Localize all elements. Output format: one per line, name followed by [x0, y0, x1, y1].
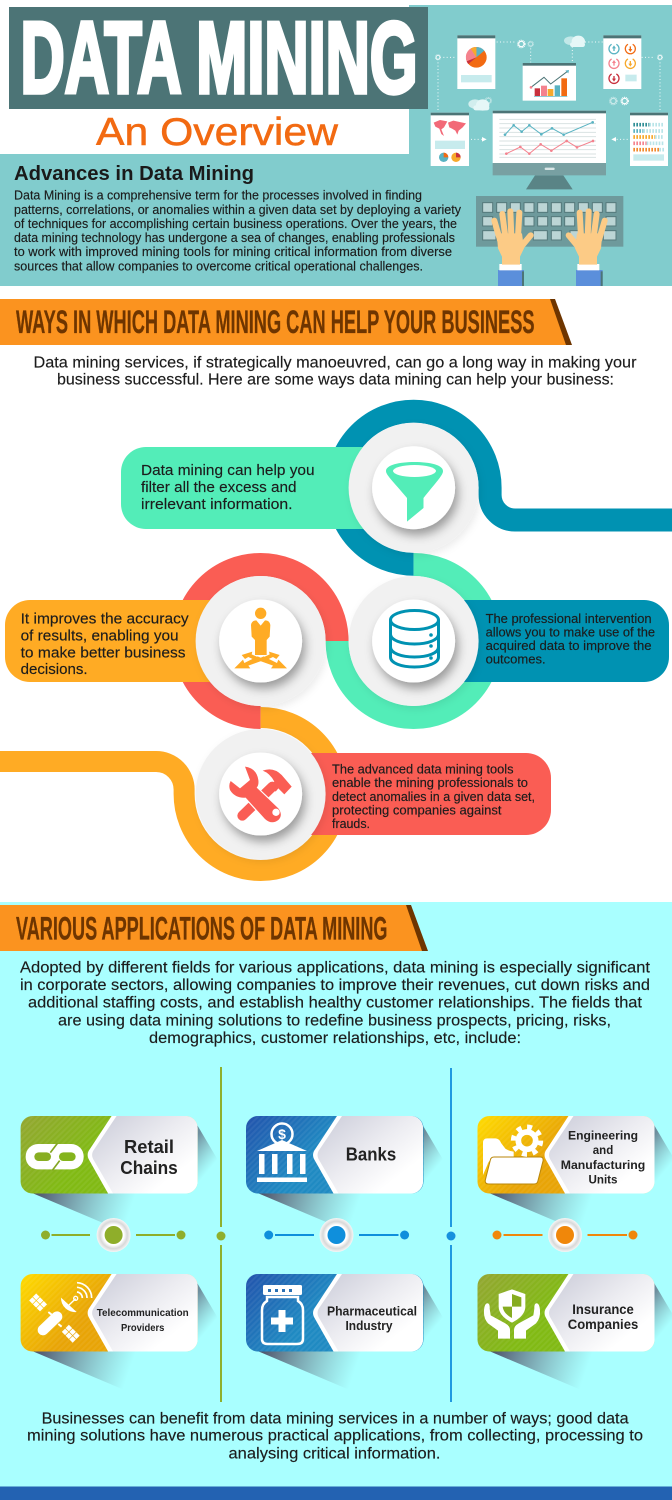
connector: orange node row — [492, 1218, 638, 1252]
text block: section one intro: Data mining services, if strategically manoeuvred, can go a long way in making your — [34, 354, 637, 372]
icon: wrench and hammer — [196, 729, 326, 859]
panel: accuracy benefit — [5, 600, 260, 682]
card: banks — [246, 1116, 448, 1241]
panel: accuracy benefit: decisions. — [21, 661, 88, 678]
text block: closing paragraph — [27, 1410, 643, 1462]
text block: applications intro: demographics, customer relationships, etc, include: — [149, 1030, 521, 1047]
text block: advances paragraph: patterns, correlations, or anomalies within a given data set by deploying a variety — [14, 202, 461, 217]
column divider: green — [216, 1067, 226, 1402]
card: insurance companies — [478, 1274, 672, 1399]
subtitle: An Overview: An Overview — [96, 111, 339, 154]
panel: anomalies benefit: The advanced data mining tools — [332, 762, 514, 776]
panel: outcomes benefit: acquired data to improve the — [486, 639, 652, 653]
panel: anomalies benefit: protecting companies against — [332, 804, 502, 818]
card: engineering and manufacturing: Manufacturing — [561, 1158, 645, 1172]
illustration: data dashboards and monitor — [431, 35, 668, 189]
icon: hands and shield — [484, 1289, 540, 1339]
text block: section one intro: business successful. Here are some ways data mining can help your business: — [57, 372, 614, 388]
panel: anomalies benefit: enable the mining professionals to — [332, 776, 528, 790]
panel: accuracy benefit: of results, enabling you — [21, 628, 179, 644]
panel: accuracy benefit: It improves the accuracy — [21, 610, 189, 628]
text block: advances paragraph: Data Mining is a comprehensive term for the processes involved in finding — [14, 188, 422, 202]
card: engineering and manufacturing: and — [593, 1143, 613, 1157]
text block: applications intro: additional staffing costs, and establish healthy customer relationships. The fields that — [28, 994, 643, 1012]
title: Data Mining — [9, 2, 428, 114]
card: telecommunication providers: Telecommunication — [97, 1307, 189, 1319]
text block: advances paragraph: data mining technology has undergone a sea of changes, enabling professionals — [14, 230, 455, 245]
footer bar — [0, 1486, 672, 1500]
icon: bank building: $ — [278, 1126, 286, 1142]
section banner: various applications — [0, 905, 428, 951]
text block: closing paragraph: Businesses can benefit from data mining services in a number of ways; good data — [42, 1410, 629, 1427]
panel: anomalies benefit — [265, 753, 551, 835]
icon: person at crossroads — [196, 576, 326, 706]
document: pie chart — [457, 35, 495, 89]
connector: red ribbon — [184, 565, 337, 718]
document: world map — [431, 113, 469, 166]
card: retail chains — [21, 1116, 223, 1241]
section banner: various applications: VARIOUS APPLICATIONS OF DATA MINING — [16, 910, 388, 946]
document: circular arrows — [603, 35, 641, 89]
text block: advances paragraph: to work with improved mining tools for mining critical information from diverse — [14, 244, 452, 259]
panel: header background — [0, 5, 672, 286]
heading: Advances in Data Mining: Advances in Data Mining — [14, 163, 254, 185]
text block: applications intro: are using data mining solutions to redefine business prospects, pricing, risks, — [58, 1012, 611, 1030]
card: banks: Banks — [346, 1144, 396, 1164]
text block: closing paragraph: analysing critical information. — [228, 1445, 440, 1462]
icon: folder and gear — [483, 1127, 543, 1184]
monitor with line charts — [493, 111, 606, 189]
card: retail chains: Chains — [120, 1158, 178, 1178]
connector: green node row — [41, 1218, 186, 1252]
connector: green ribbon — [337, 564, 490, 718]
document: bar chart — [523, 63, 576, 101]
card: engineering and manufacturing: Units — [588, 1172, 618, 1186]
card: engineering and manufacturing — [478, 1116, 672, 1241]
column divider: blue — [446, 1068, 456, 1402]
card: telecommunication providers: Providers — [121, 1322, 165, 1334]
panel: filter benefit: irrelevant information. — [141, 496, 292, 513]
text block: advances paragraph: of techniques for accomplishing certain business operations. Over the years, the — [14, 216, 457, 231]
card: insurance companies: Insurance — [572, 1302, 634, 1317]
panel: outcomes benefit — [420, 600, 669, 682]
connector: orange ribbon — [0, 718, 337, 871]
text block: applications intro: in corporate sectors, allowing companies to improve their revenues, cut down risks and — [20, 977, 650, 994]
icon: chain links — [26, 1143, 84, 1170]
panel: outcomes benefit: The professional intervention — [486, 612, 652, 626]
connector: blue node row — [264, 1218, 409, 1252]
panel: anomalies benefit: detect anomalies in a given data set, — [332, 790, 535, 804]
panel: accuracy benefit: to make better business — [21, 644, 186, 662]
panel: filter benefit: filter all the excess and — [141, 479, 296, 496]
card: engineering and manufacturing: Engineering — [568, 1128, 638, 1142]
panel: outcomes benefit: allows you to make use of the — [486, 626, 655, 640]
panel: anomalies benefit: frauds. — [332, 817, 370, 831]
panel: filter benefit — [121, 447, 421, 529]
text block: advances paragraph: sources that allow companies to overcome critical operational challenges. — [14, 258, 423, 274]
panel: outcomes benefit: outcomes. — [486, 652, 546, 666]
title: Data Mining: DATA MINING — [20, 2, 418, 114]
card: pharmaceutical industry: Industry — [346, 1318, 393, 1333]
text block: applications intro: Adopted by different fields for various applications, data mining is especially significant — [20, 960, 651, 976]
card: pharmaceutical industry — [246, 1274, 448, 1399]
text block: closing paragraph: mining solutions have numerous practical applications, from collecting, processing to — [27, 1428, 643, 1445]
document: people rows — [630, 113, 668, 166]
icon: database — [349, 576, 479, 706]
icon: medicine bottle — [262, 1285, 303, 1344]
card: pharmaceutical industry: Pharmaceutical — [327, 1304, 417, 1318]
card: retail chains: Retail — [124, 1137, 174, 1157]
icon: satellite — [29, 1283, 92, 1343]
card: insurance companies: Companies — [568, 1317, 638, 1332]
illustration: keyboard and hands — [476, 196, 623, 286]
card: telecommunication providers — [21, 1274, 223, 1399]
panel: applications background — [0, 902, 672, 1487]
connector: teal ribbon — [337, 411, 672, 564]
panel: filter benefit: Data mining can help you — [141, 462, 314, 479]
icon: funnel — [349, 423, 479, 553]
text block: section one intro — [34, 354, 637, 388]
text block: advances paragraph — [14, 188, 461, 274]
text block: applications intro — [20, 960, 651, 1047]
section banner: ways in which data mining can help — [0, 299, 572, 345]
icon: bank building — [257, 1124, 307, 1182]
